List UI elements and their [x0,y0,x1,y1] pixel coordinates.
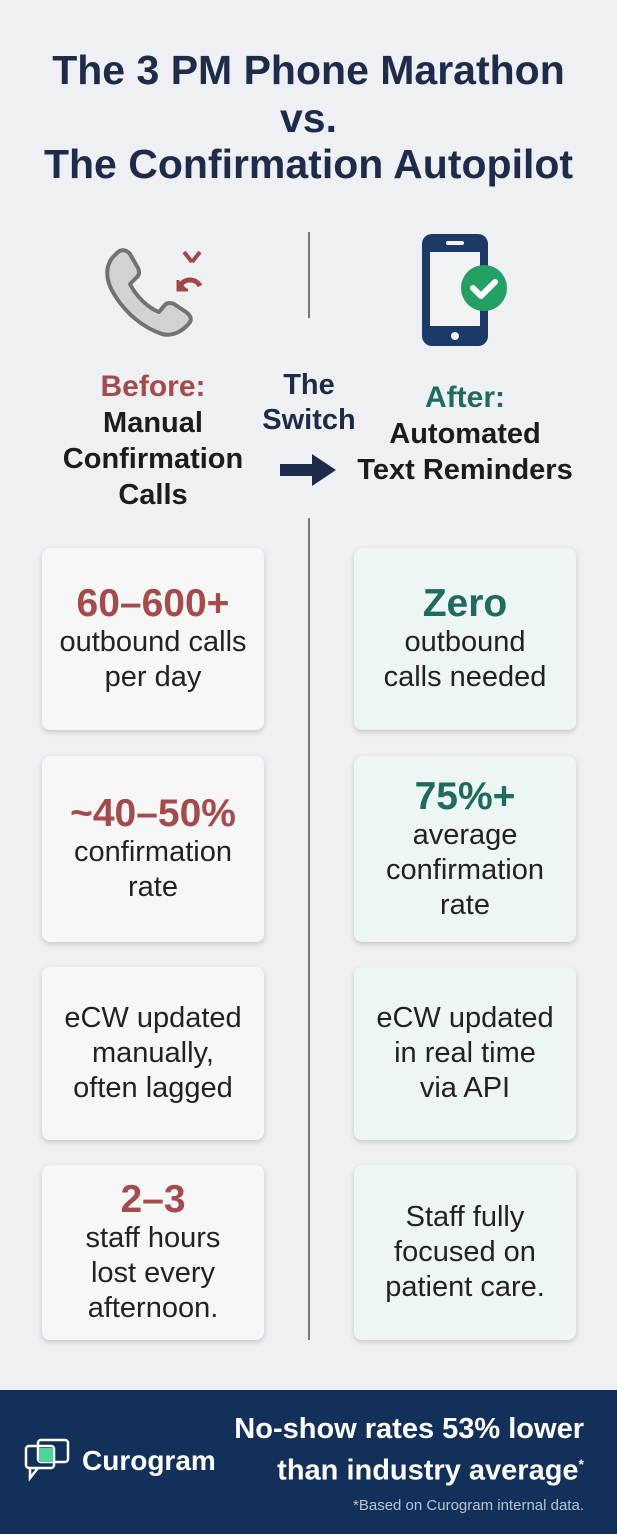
footer headline [234,1413,584,1487]
card: calls before: 60–600+ [77,582,229,625]
divider line [308,232,310,318]
heading: the switch [262,369,356,436]
card: eCW after: eCW updated [376,1002,554,1034]
card: staff after [354,1165,576,1340]
arrow [280,454,336,486]
card: calls after [354,548,576,730]
icon: smartphone with check [422,234,507,346]
title: The Confirmation Autopilot [44,141,573,187]
card: eCW before [42,967,264,1140]
card: eCW before: often lagged [73,1072,233,1104]
card: staff before: 2–3 [120,1178,186,1221]
card: calls after: calls needed [384,661,546,693]
card: calls after: outbound [405,626,525,658]
card: rate before: confirmation [74,836,232,868]
card: rate before [42,756,264,942]
heading: before: Calls [118,479,188,511]
heading: after [357,381,573,486]
logo: Curogram [82,1445,216,1476]
title: vs. [280,95,337,141]
title [44,47,573,187]
card: rate before: rate [128,871,178,903]
footnote: *Based on Curogram internal data. [353,1497,584,1514]
card: rate after: 75%+ [415,774,515,818]
card: calls before: per day [105,661,201,693]
heading: before: Before: [100,370,206,403]
card: staff after: patient care. [385,1271,545,1303]
heading: after: Automated [389,418,541,450]
heading: the switch: Switch [262,404,356,436]
card: rate after [354,756,576,942]
card: calls after: Zero [423,582,507,625]
card: calls before: outbound calls [59,626,247,658]
footer [0,1390,617,1534]
icon: phone missed call [105,248,202,337]
footer headline: than industry average* [277,1455,584,1487]
card: rate after: average [413,818,517,850]
card: calls before [42,548,264,730]
heading: before: Manual [103,407,203,439]
card: eCW after [354,967,576,1140]
card: staff before: afternoon. [88,1292,218,1324]
card: staff before [42,1165,264,1340]
card: eCW before: manually, [92,1037,214,1069]
card: staff before: lost every [91,1257,215,1289]
card: eCW after: in real time [394,1037,536,1069]
heading: the switch: The [283,369,335,401]
card: rate before: ~40–50% [70,792,236,835]
card: rate after: confirmation [386,854,544,886]
card: staff before: staff hours [86,1222,220,1254]
card: rate after: rate [440,888,490,920]
heading: after: After: [425,381,505,414]
card: eCW after: via API [420,1072,510,1104]
title: The 3 PM Phone Marathon [52,47,565,93]
heading: before [63,370,243,511]
heading: after: Text Reminders [357,454,573,486]
card: staff after: Staff fully [406,1201,524,1233]
logo [24,1438,216,1482]
footer headline: No-show rates 53% lower [234,1413,584,1445]
heading: before: Confirmation [63,443,243,475]
card: eCW before: eCW updated [64,1002,242,1034]
card: staff after: focused on [394,1236,536,1268]
